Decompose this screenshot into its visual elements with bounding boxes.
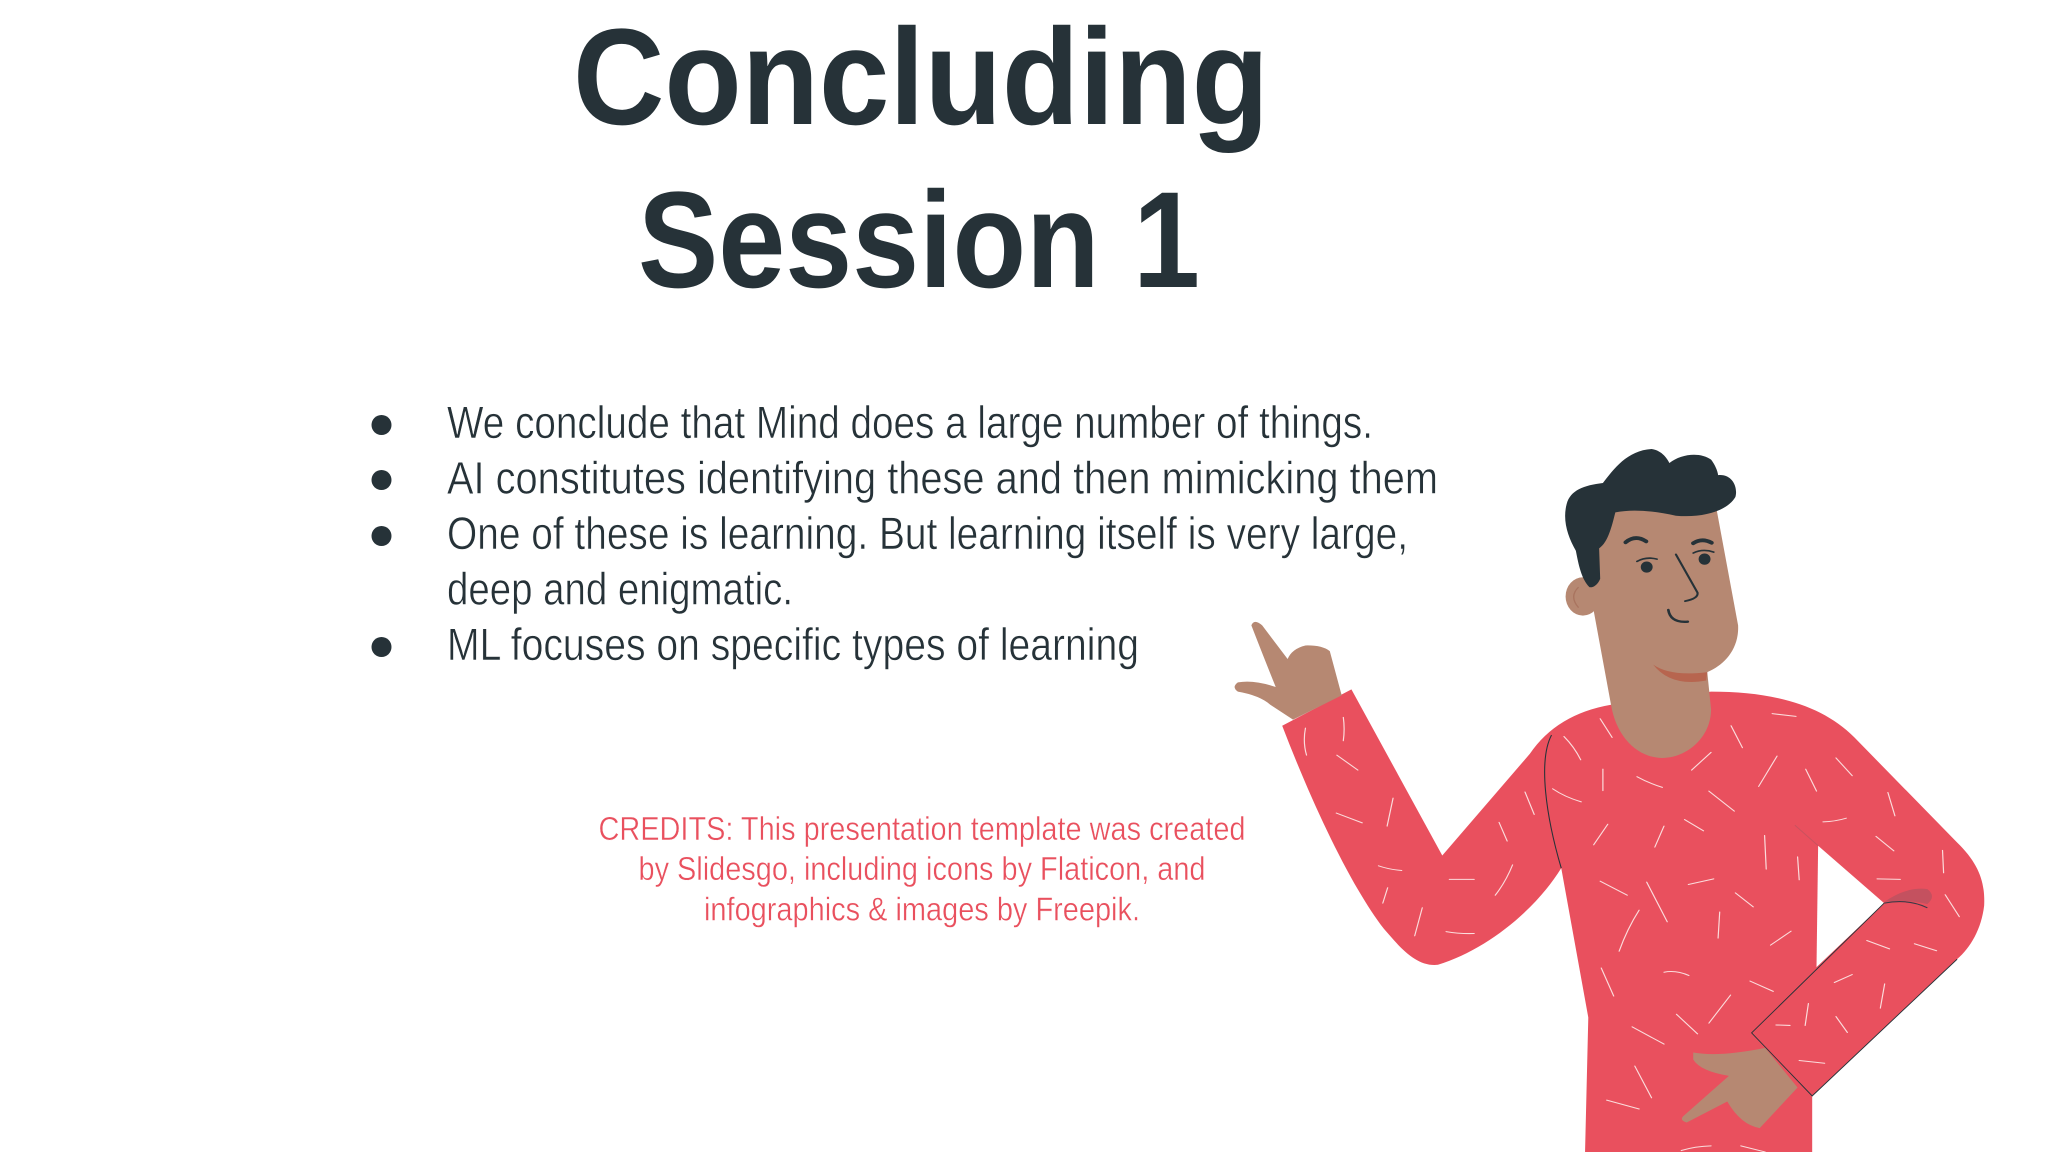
lower hand xyxy=(1682,1048,1798,1128)
title: Concluding xyxy=(573,1,1269,154)
bullet list xyxy=(372,397,1438,670)
face and neck xyxy=(1592,509,1738,758)
credits text: by Slidesgo, including icons by Flaticon, and xyxy=(638,851,1206,888)
title: Session 1 xyxy=(638,164,1200,317)
sweater xyxy=(1282,689,1984,1152)
facial features xyxy=(1626,538,1714,622)
bullet 3 xyxy=(372,508,1408,614)
chin shadow xyxy=(1653,665,1707,682)
title xyxy=(573,1,1269,317)
credits text xyxy=(598,811,1246,928)
bullet 3: deep and enigmatic. xyxy=(447,564,793,614)
hair xyxy=(1565,449,1736,587)
bullet 1: We conclude that Mind does a large number of things. xyxy=(447,397,1373,448)
credits text: CREDITS: This presentation template was created xyxy=(598,811,1246,848)
bullet 4: ML focuses on specific types of learning xyxy=(447,619,1139,670)
credits text: infographics & images by Freepik. xyxy=(704,892,1140,928)
bullet 3: One of these is learning. But learning itself is very large, xyxy=(447,508,1408,559)
illustration: man pointing xyxy=(1235,449,1984,1152)
bullet 2: AI constitutes identifying these and then mimicking them xyxy=(447,452,1438,504)
ear xyxy=(1566,577,1600,616)
raised hand xyxy=(1235,622,1342,720)
